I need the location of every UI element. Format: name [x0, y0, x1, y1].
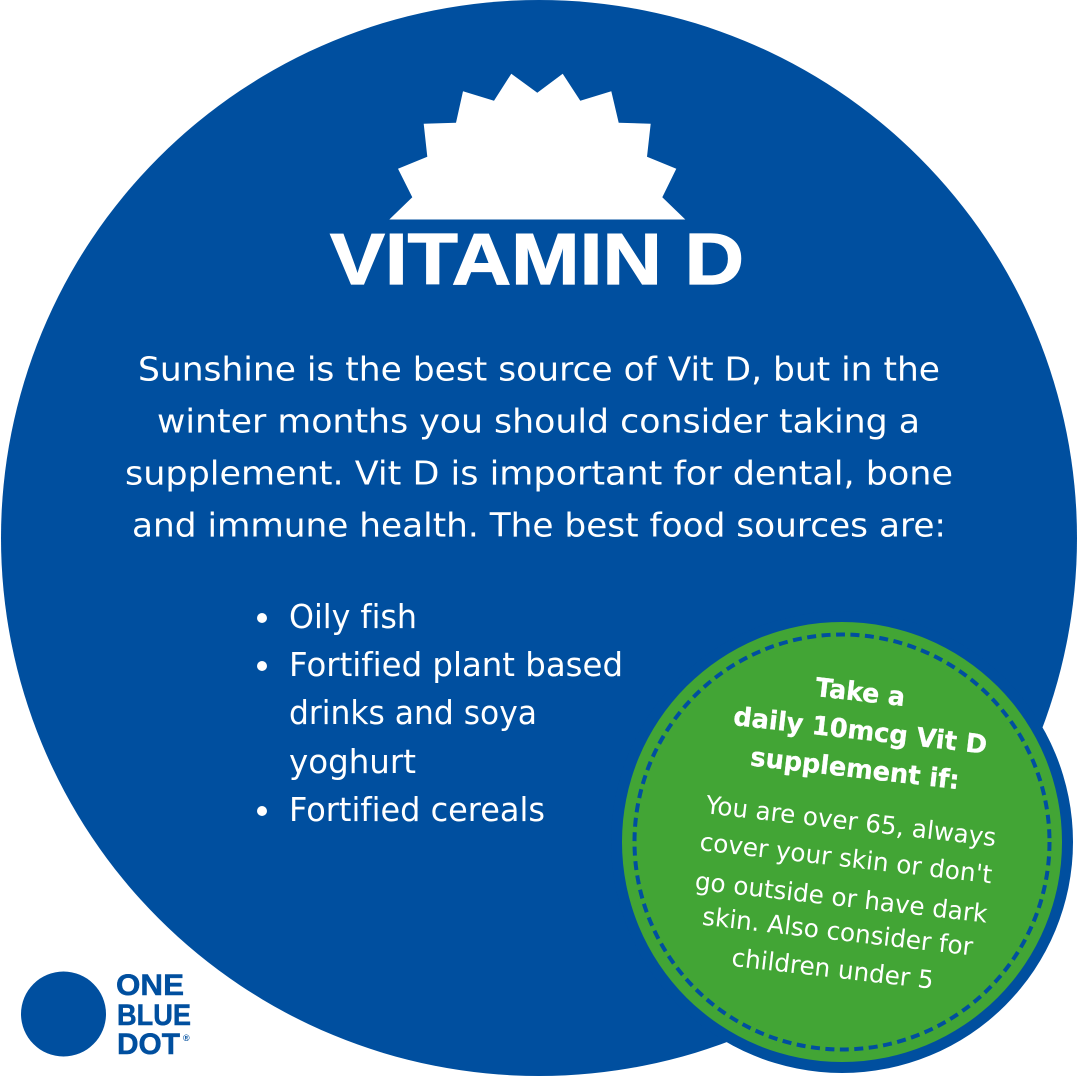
callout heading [732, 673, 989, 796]
bullet list: food sources [257, 597, 623, 829]
bullet list: food sources: Fortified cereals [289, 790, 545, 829]
logo: One Blue Dot: DOT [117, 1028, 180, 1061]
text block: introduction: and immune health. The best food sources are: [132, 506, 946, 544]
text block: introduction: Sunshine is the best source of Vit D, but in the [138, 350, 940, 388]
callout body text: go outside or have dark [694, 867, 989, 929]
callout heading: daily 10mcg Vit D [732, 702, 989, 761]
logo: One Blue Dot: BLUE [117, 999, 191, 1032]
bullet list: food sources: Fortified plant based [289, 645, 623, 684]
text block: introduction: winter months you should consider taking a [157, 402, 920, 440]
bullet list: food sources: Oily fish [289, 597, 417, 636]
logo: One Blue Dot: ® [183, 1033, 190, 1043]
logo: One Blue Dot [21, 969, 191, 1061]
text block: introduction [125, 350, 953, 544]
title: VITAMIN D [330, 220, 744, 300]
callout heading: supplement if: [749, 743, 961, 796]
callout body text: skin. Also consider for [701, 902, 975, 961]
icon: rising sun [389, 74, 685, 220]
callout body text: children under 5 [730, 943, 935, 995]
logo: One Blue Dot: ONE [116, 969, 184, 1002]
callout: supplement advice [611, 611, 1073, 1073]
callout body text: cover your skin or don't [698, 827, 994, 889]
callout body text: You are over 65, always [703, 790, 998, 852]
bullet list: food sources: yoghurt [289, 742, 416, 781]
bullet list: food sources: drinks and soya [289, 693, 537, 732]
callout body text [694, 790, 998, 995]
text block: introduction: supplement. Vit D is important for dental, bone [125, 454, 953, 492]
callout heading: Take a [814, 673, 907, 713]
